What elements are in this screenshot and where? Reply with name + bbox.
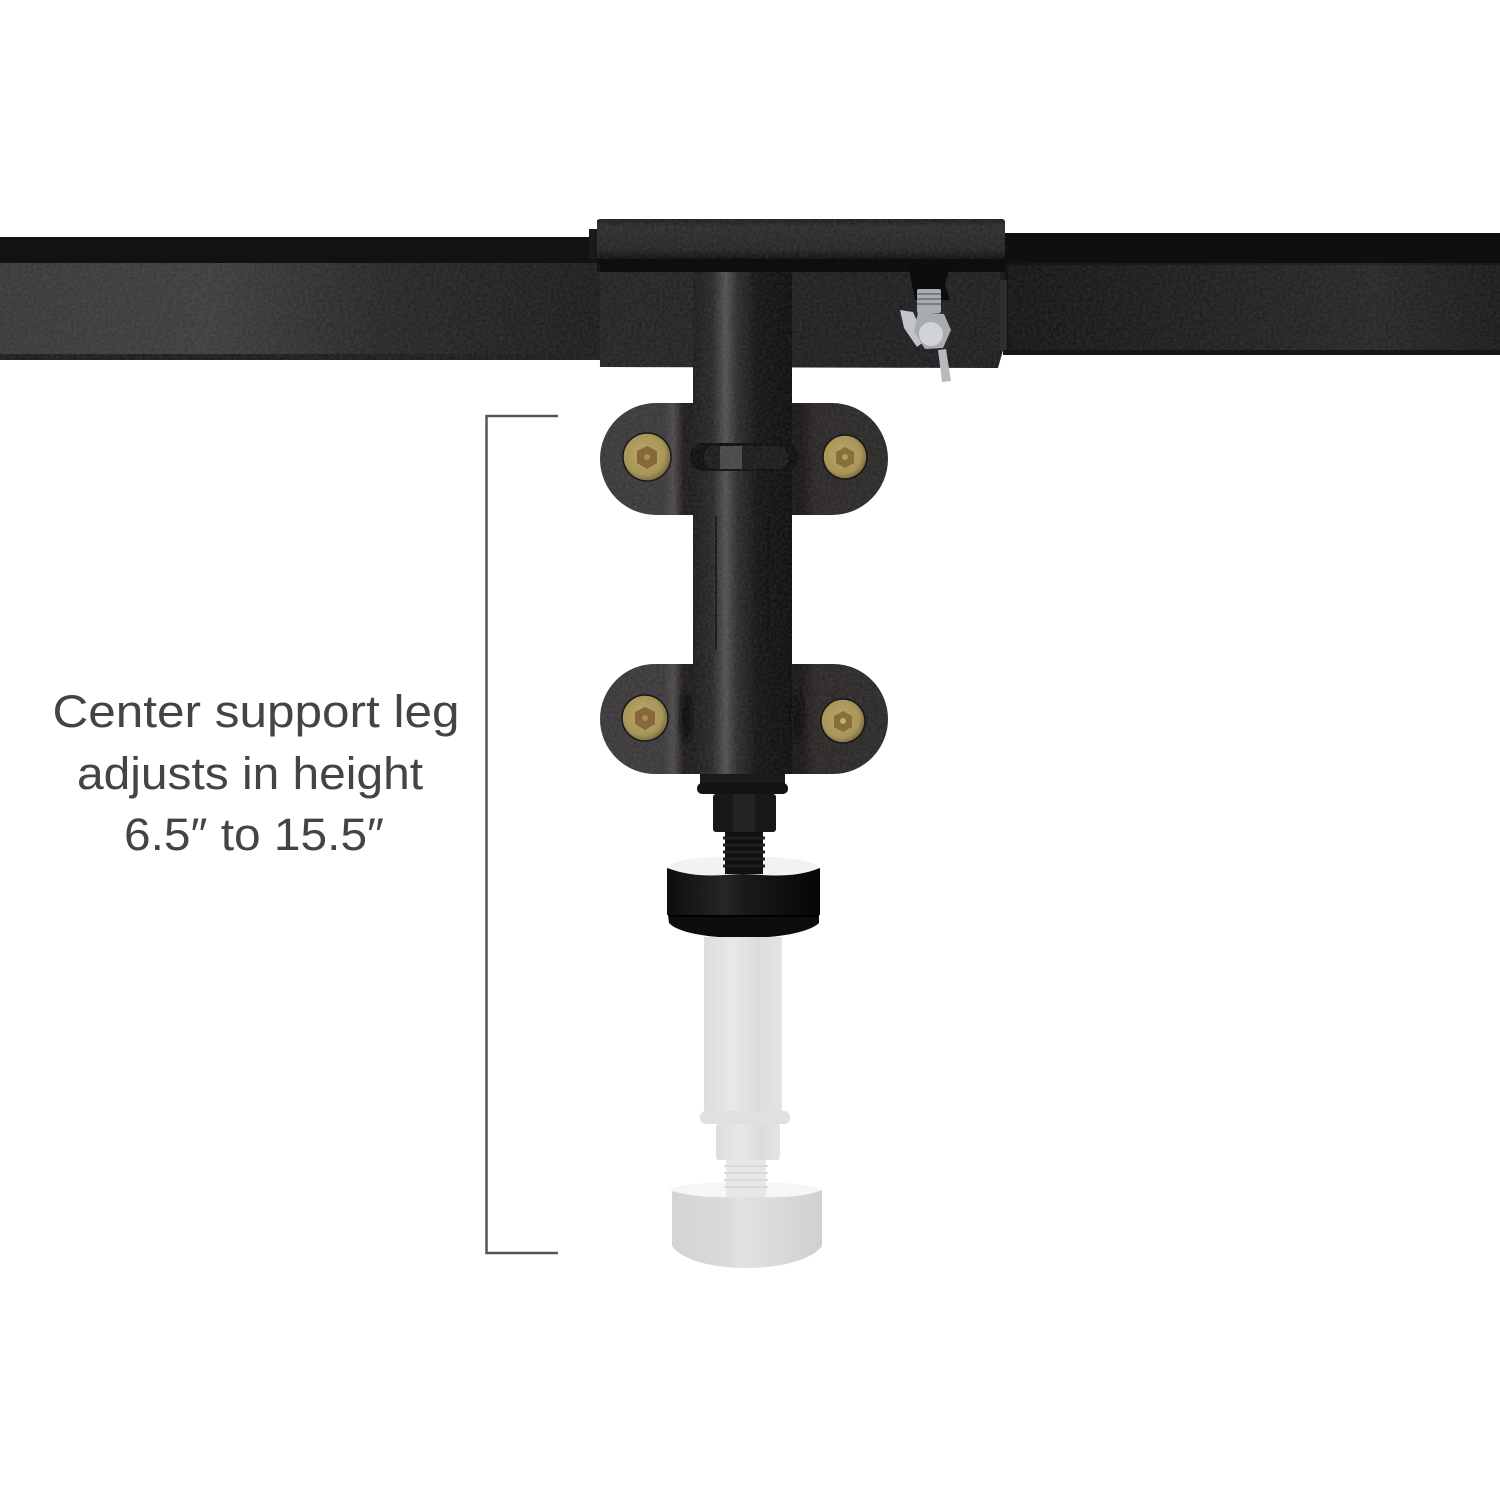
caption text <box>52 686 460 860</box>
sliding T bracket <box>589 219 1007 368</box>
caption text: adjusts in height <box>77 748 424 799</box>
right bed rail <box>1003 233 1500 355</box>
wing nut and carriage bolt <box>900 264 951 382</box>
brass hex bolts <box>622 433 867 743</box>
nut, thread and foot of support leg <box>667 774 820 938</box>
ghosted lower leg position <box>670 937 822 1268</box>
caption text: 6.5″ to 15.5″ <box>124 809 384 860</box>
upper clamp and support leg body <box>600 272 888 774</box>
caption text: Center support leg <box>52 686 460 737</box>
upper clamp <box>600 403 888 515</box>
lower clamp <box>600 664 888 774</box>
adjustment slot <box>690 443 798 471</box>
left bed rail <box>0 237 600 360</box>
powder coat texture <box>0 219 1500 774</box>
foot puck <box>667 856 819 880</box>
height range bracket <box>486 416 558 1253</box>
thread <box>725 832 763 874</box>
